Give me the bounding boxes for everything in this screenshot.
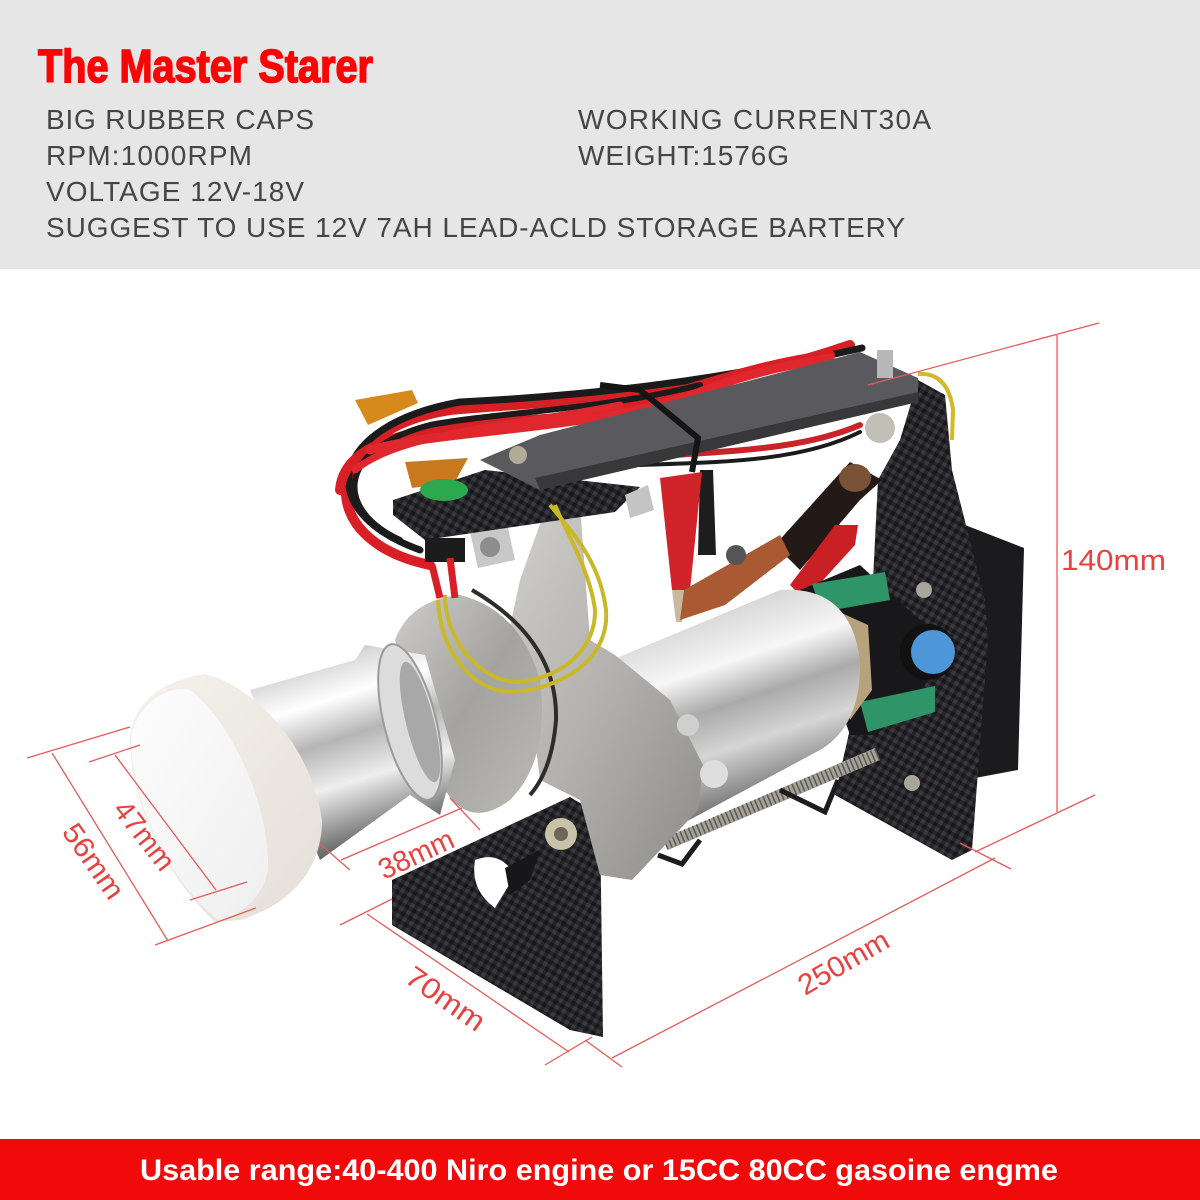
yellow-green wire loop <box>438 505 606 692</box>
label: 56mm: 56mm <box>55 818 130 906</box>
label: 70mm: 70mm <box>399 961 491 1038</box>
footer banner <box>0 1139 1200 1200</box>
specification list: WORKING CURRENT30A <box>578 104 931 135</box>
header panel <box>0 0 1200 269</box>
blue button <box>900 624 956 680</box>
top switch plate <box>393 470 640 540</box>
specification list: VOLTAGE 12V-18V <box>46 176 304 207</box>
specification list: WEIGHT:1576G <box>578 140 789 171</box>
title: The Master Starer <box>38 40 373 92</box>
clips and red boots <box>775 462 882 570</box>
label: 47mm: 47mm <box>106 795 181 877</box>
carbon top bar <box>480 352 918 490</box>
motor end cap with green bands <box>800 565 925 735</box>
top bar screws <box>877 350 893 378</box>
label: 140mm: 140mm <box>1061 545 1166 577</box>
front carbon plate <box>392 797 603 1037</box>
bolts on housing <box>545 818 577 850</box>
connectors <box>355 390 418 425</box>
cast housing <box>505 505 703 880</box>
wires behind top bar <box>340 345 862 565</box>
product illustration: engine starter <box>130 345 1024 1037</box>
aluminium shaft <box>250 645 455 860</box>
label: 250mm: 250mm <box>792 924 895 1002</box>
dimension labels <box>55 545 1166 1038</box>
specification list <box>46 104 931 243</box>
rear carbon plate <box>835 380 988 860</box>
footer banner: Usable range:40-400 Niro engine or 15CC 80CC gasoine engme <box>140 1154 1058 1187</box>
cable tie <box>600 385 698 472</box>
motor body <box>612 590 860 825</box>
threaded rod <box>665 748 880 850</box>
dimension lines <box>27 323 1099 1067</box>
specification list: SUGGEST TO USE 12V 7AH LEAD-ACLD STORAGE BARTERY <box>46 212 905 243</box>
rear battery box <box>965 525 1024 778</box>
white rubber cap <box>130 674 322 922</box>
label: 38mm: 38mm <box>373 824 459 886</box>
red wire terminals <box>432 558 455 598</box>
specification list: RPM:1000RPM <box>46 140 252 171</box>
specification list: BIG RUBBER CAPS <box>46 104 314 135</box>
